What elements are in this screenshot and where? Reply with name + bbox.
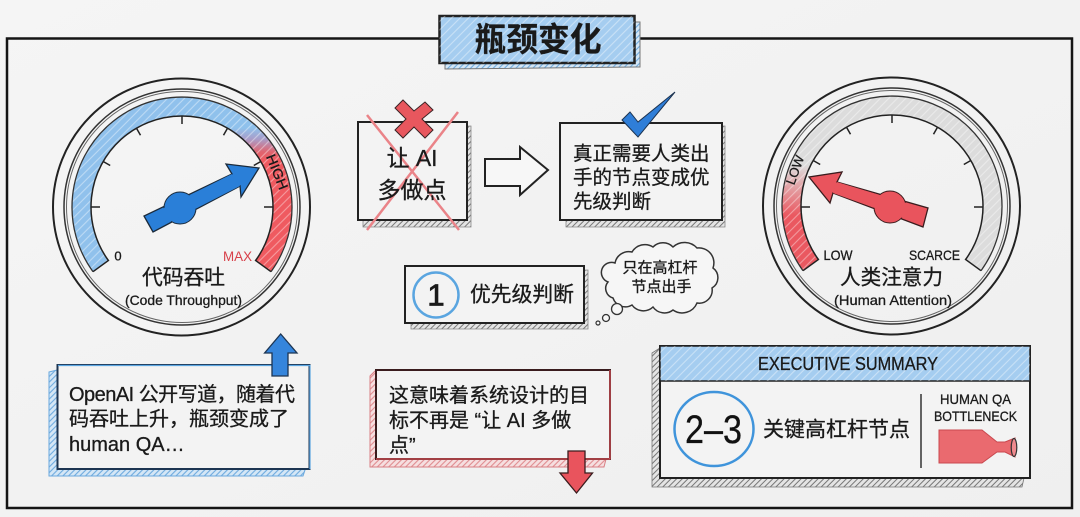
panel: real human decision points: 真正需要人类出 (573, 143, 710, 165)
circled number: 2–3 (685, 408, 742, 452)
panel: crossed-out option (358, 100, 471, 230)
icon: blue check (622, 92, 675, 137)
note: red callout: 标不再是 “让 AI 多做 (389, 409, 571, 432)
note: red callout: 这意味着系统设计的目 (389, 384, 589, 407)
icon: red X (395, 100, 433, 138)
band label: LOW: LOW (783, 153, 807, 187)
gauge title: 人类注意力 (840, 266, 943, 290)
needle: red (809, 172, 928, 227)
arrow: blue up (265, 334, 297, 376)
panel: crossed-out option: 让 AI (386, 145, 438, 171)
tick label: HIGH: HIGH (263, 152, 291, 192)
note: red callout (370, 370, 610, 467)
title banner (440, 16, 640, 69)
gauge title: 代码吞吐 (142, 266, 225, 290)
thought bubble: 节点出手 (631, 278, 692, 296)
panel: real human decision points: 手的节点变成优 (573, 167, 710, 189)
scale label: LOW: LOW (824, 247, 853, 263)
arrow: red down (560, 451, 592, 493)
note: blue callout: OpenAI 公开写道，随着代 (69, 383, 295, 406)
tick label: MAX: MAX (223, 248, 253, 264)
scale label: SCARCE: SCARCE (909, 247, 960, 263)
panel: executive summary: BOTTLENECK (934, 408, 1018, 424)
panel: priority judgement (405, 266, 588, 329)
gauge subtitle: (Code Throughput) (125, 292, 242, 308)
red strike lines (367, 112, 459, 230)
needle: blue (144, 164, 259, 232)
note: blue callout: human QA… (69, 434, 185, 456)
note: red callout: 点” (389, 434, 416, 457)
panel: priority judgement: 1 (427, 278, 445, 312)
panel: crossed-out option: 多做点 (378, 177, 446, 203)
note: blue callout (49, 365, 310, 476)
gauge: code throughput (53, 78, 310, 336)
arrow: transition (485, 147, 548, 195)
note: blue callout: 码吞吐上升，瓶颈变成了 (69, 408, 289, 430)
circled number (674, 392, 754, 466)
gauge subtitle: (Human Attention) (834, 292, 952, 308)
summary header: EXECUTIVE SUMMARY (758, 354, 938, 374)
panel: real human decision points (560, 92, 725, 227)
bottle label: HUMAN QA (940, 391, 1012, 407)
summary header (660, 346, 1030, 381)
tick label: 0: 0 (114, 248, 122, 264)
panel: priority judgement: 优先级判断 (470, 284, 574, 306)
summary label: 关键高杠杆节点 (763, 418, 910, 442)
icon: bottle (939, 430, 1017, 463)
thought bubble (596, 243, 718, 325)
gauge: human attention (763, 78, 1020, 334)
title banner: 瓶颈变化 (474, 21, 602, 58)
panel: real human decision points: 先级判断 (573, 191, 651, 213)
panel: executive summary (652, 346, 1030, 487)
thought bubble: 只在高杠杆 (622, 260, 698, 276)
